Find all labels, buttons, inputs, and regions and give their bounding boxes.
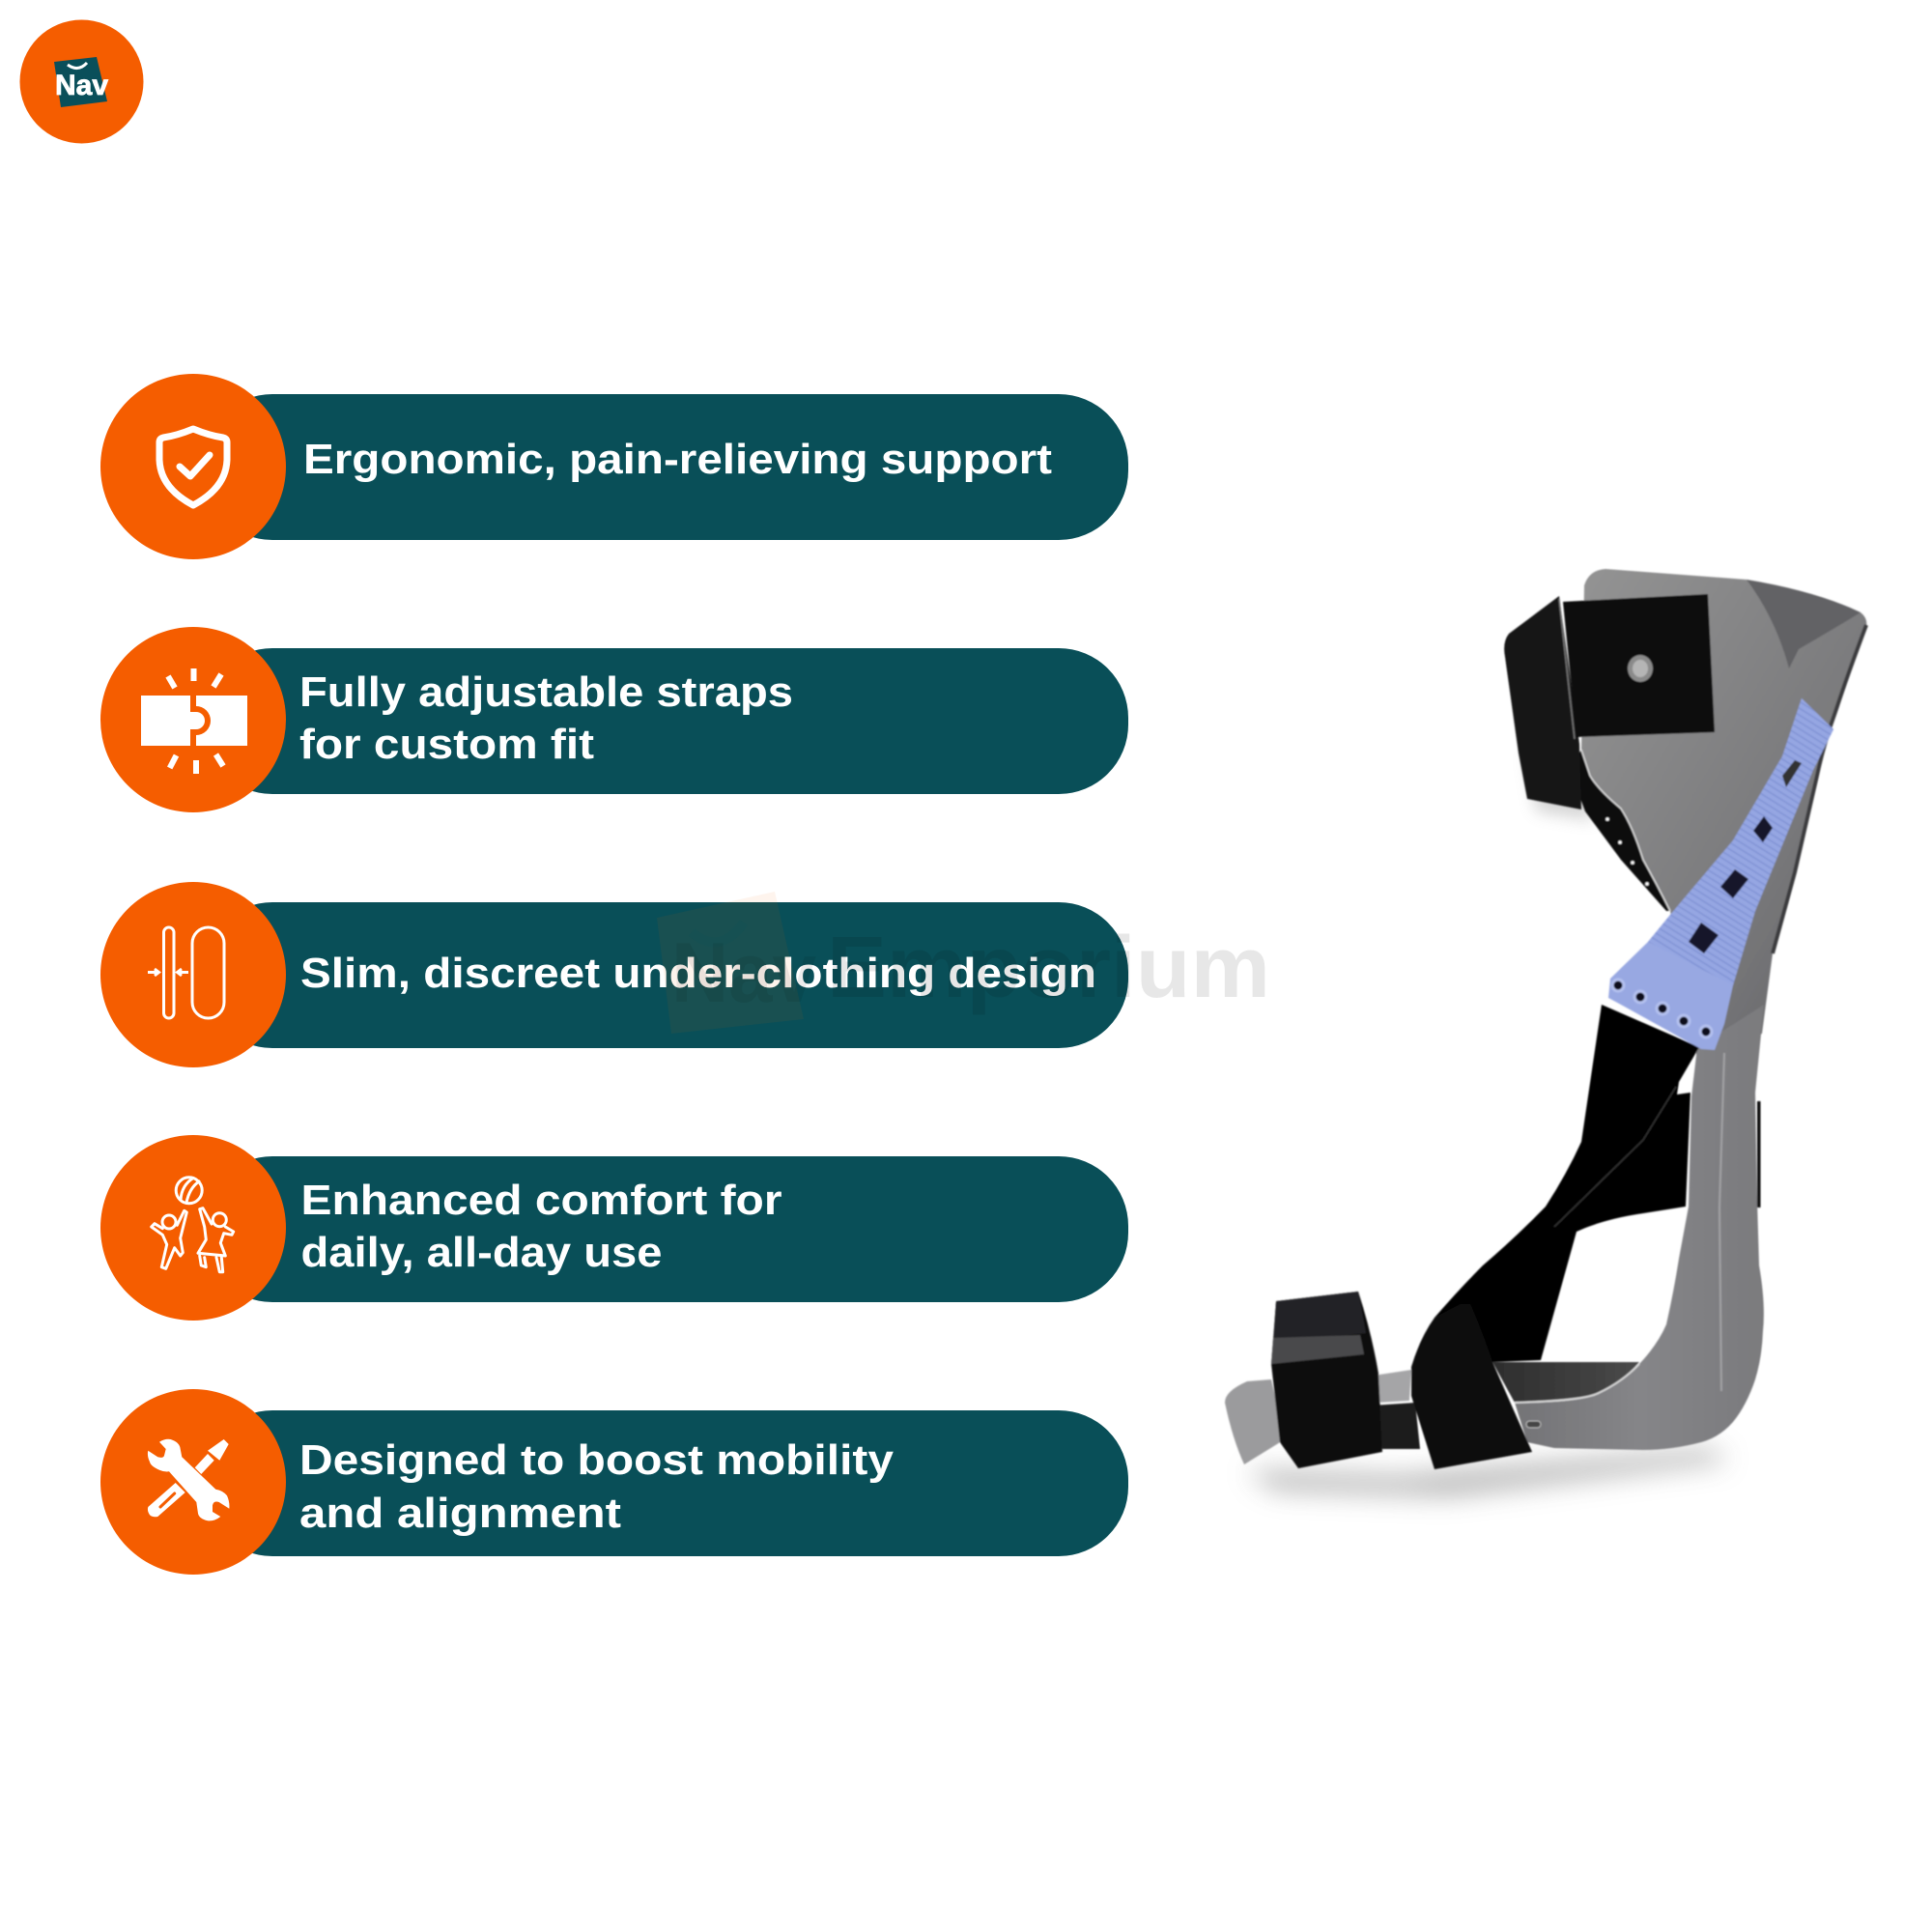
feature row 2 <box>100 627 1128 812</box>
feature row 4 <box>100 1135 1128 1321</box>
thin perforated strap <box>1570 750 1670 911</box>
icon: joined puzzle pieces with rays <box>141 668 247 774</box>
logo: Nav badge: Nav <box>55 70 108 101</box>
label 3: Slim, discreet under-clothing design <box>300 950 1096 997</box>
watermark: Nav Emporium <box>657 892 1270 1034</box>
ground shadow <box>1246 1449 1729 1495</box>
front sole plate <box>1225 1379 1285 1464</box>
pill 3 <box>203 902 1128 1048</box>
upper shell <box>1581 569 1866 1060</box>
icon circle 2 <box>100 627 286 812</box>
upper velcro strap <box>1504 594 1715 810</box>
icon: shield with check <box>159 429 227 505</box>
sole slot <box>1526 1421 1541 1428</box>
feature row 2: for custom fit <box>299 721 594 768</box>
blue adjuster plate <box>1608 698 1833 1050</box>
logo: Nav badge <box>19 19 143 143</box>
feature row 3 <box>100 882 1128 1067</box>
large black straps <box>1435 1005 1699 1362</box>
icon circle 5 <box>100 1389 286 1575</box>
icon: children playing with ball <box>152 1178 234 1272</box>
pill 2 <box>203 648 1128 794</box>
icon circle 3 <box>100 882 286 1067</box>
icon circle 1 <box>100 374 286 559</box>
product photo: ankle foot brace <box>1225 569 1866 1495</box>
rear black strip <box>1757 1101 1760 1208</box>
feature row 5 <box>100 1389 1128 1575</box>
inner sole <box>1492 1362 1639 1403</box>
front wrap strap <box>1411 1304 1532 1469</box>
feature row 1 <box>100 374 1128 559</box>
watermark: Nav Emporium: Nav <box>671 924 816 1020</box>
toe strap <box>1271 1292 1382 1468</box>
label 1: Ergonomic, pain-relieving support <box>303 436 1052 483</box>
icon circle 4 <box>100 1135 286 1321</box>
label 5: Designed to boost mobility <box>299 1436 895 1484</box>
lower shell <box>1515 1005 1764 1450</box>
watermark wordmark: Emporium <box>827 920 1270 1016</box>
label 4: Enhanced comfort for <box>301 1177 782 1224</box>
watermark logo <box>657 892 804 1034</box>
label 2: Fully adjustable straps <box>299 668 793 716</box>
feature row 4: daily, all-day use <box>301 1229 663 1276</box>
icon: slim profile comparison <box>148 927 224 1018</box>
pill 5 <box>203 1410 1128 1556</box>
pill 4 <box>203 1156 1128 1302</box>
pill 1 <box>203 394 1128 540</box>
icon: crossed wrench and screwdriver <box>148 1439 229 1520</box>
feature row 5: and alignment <box>299 1490 621 1537</box>
